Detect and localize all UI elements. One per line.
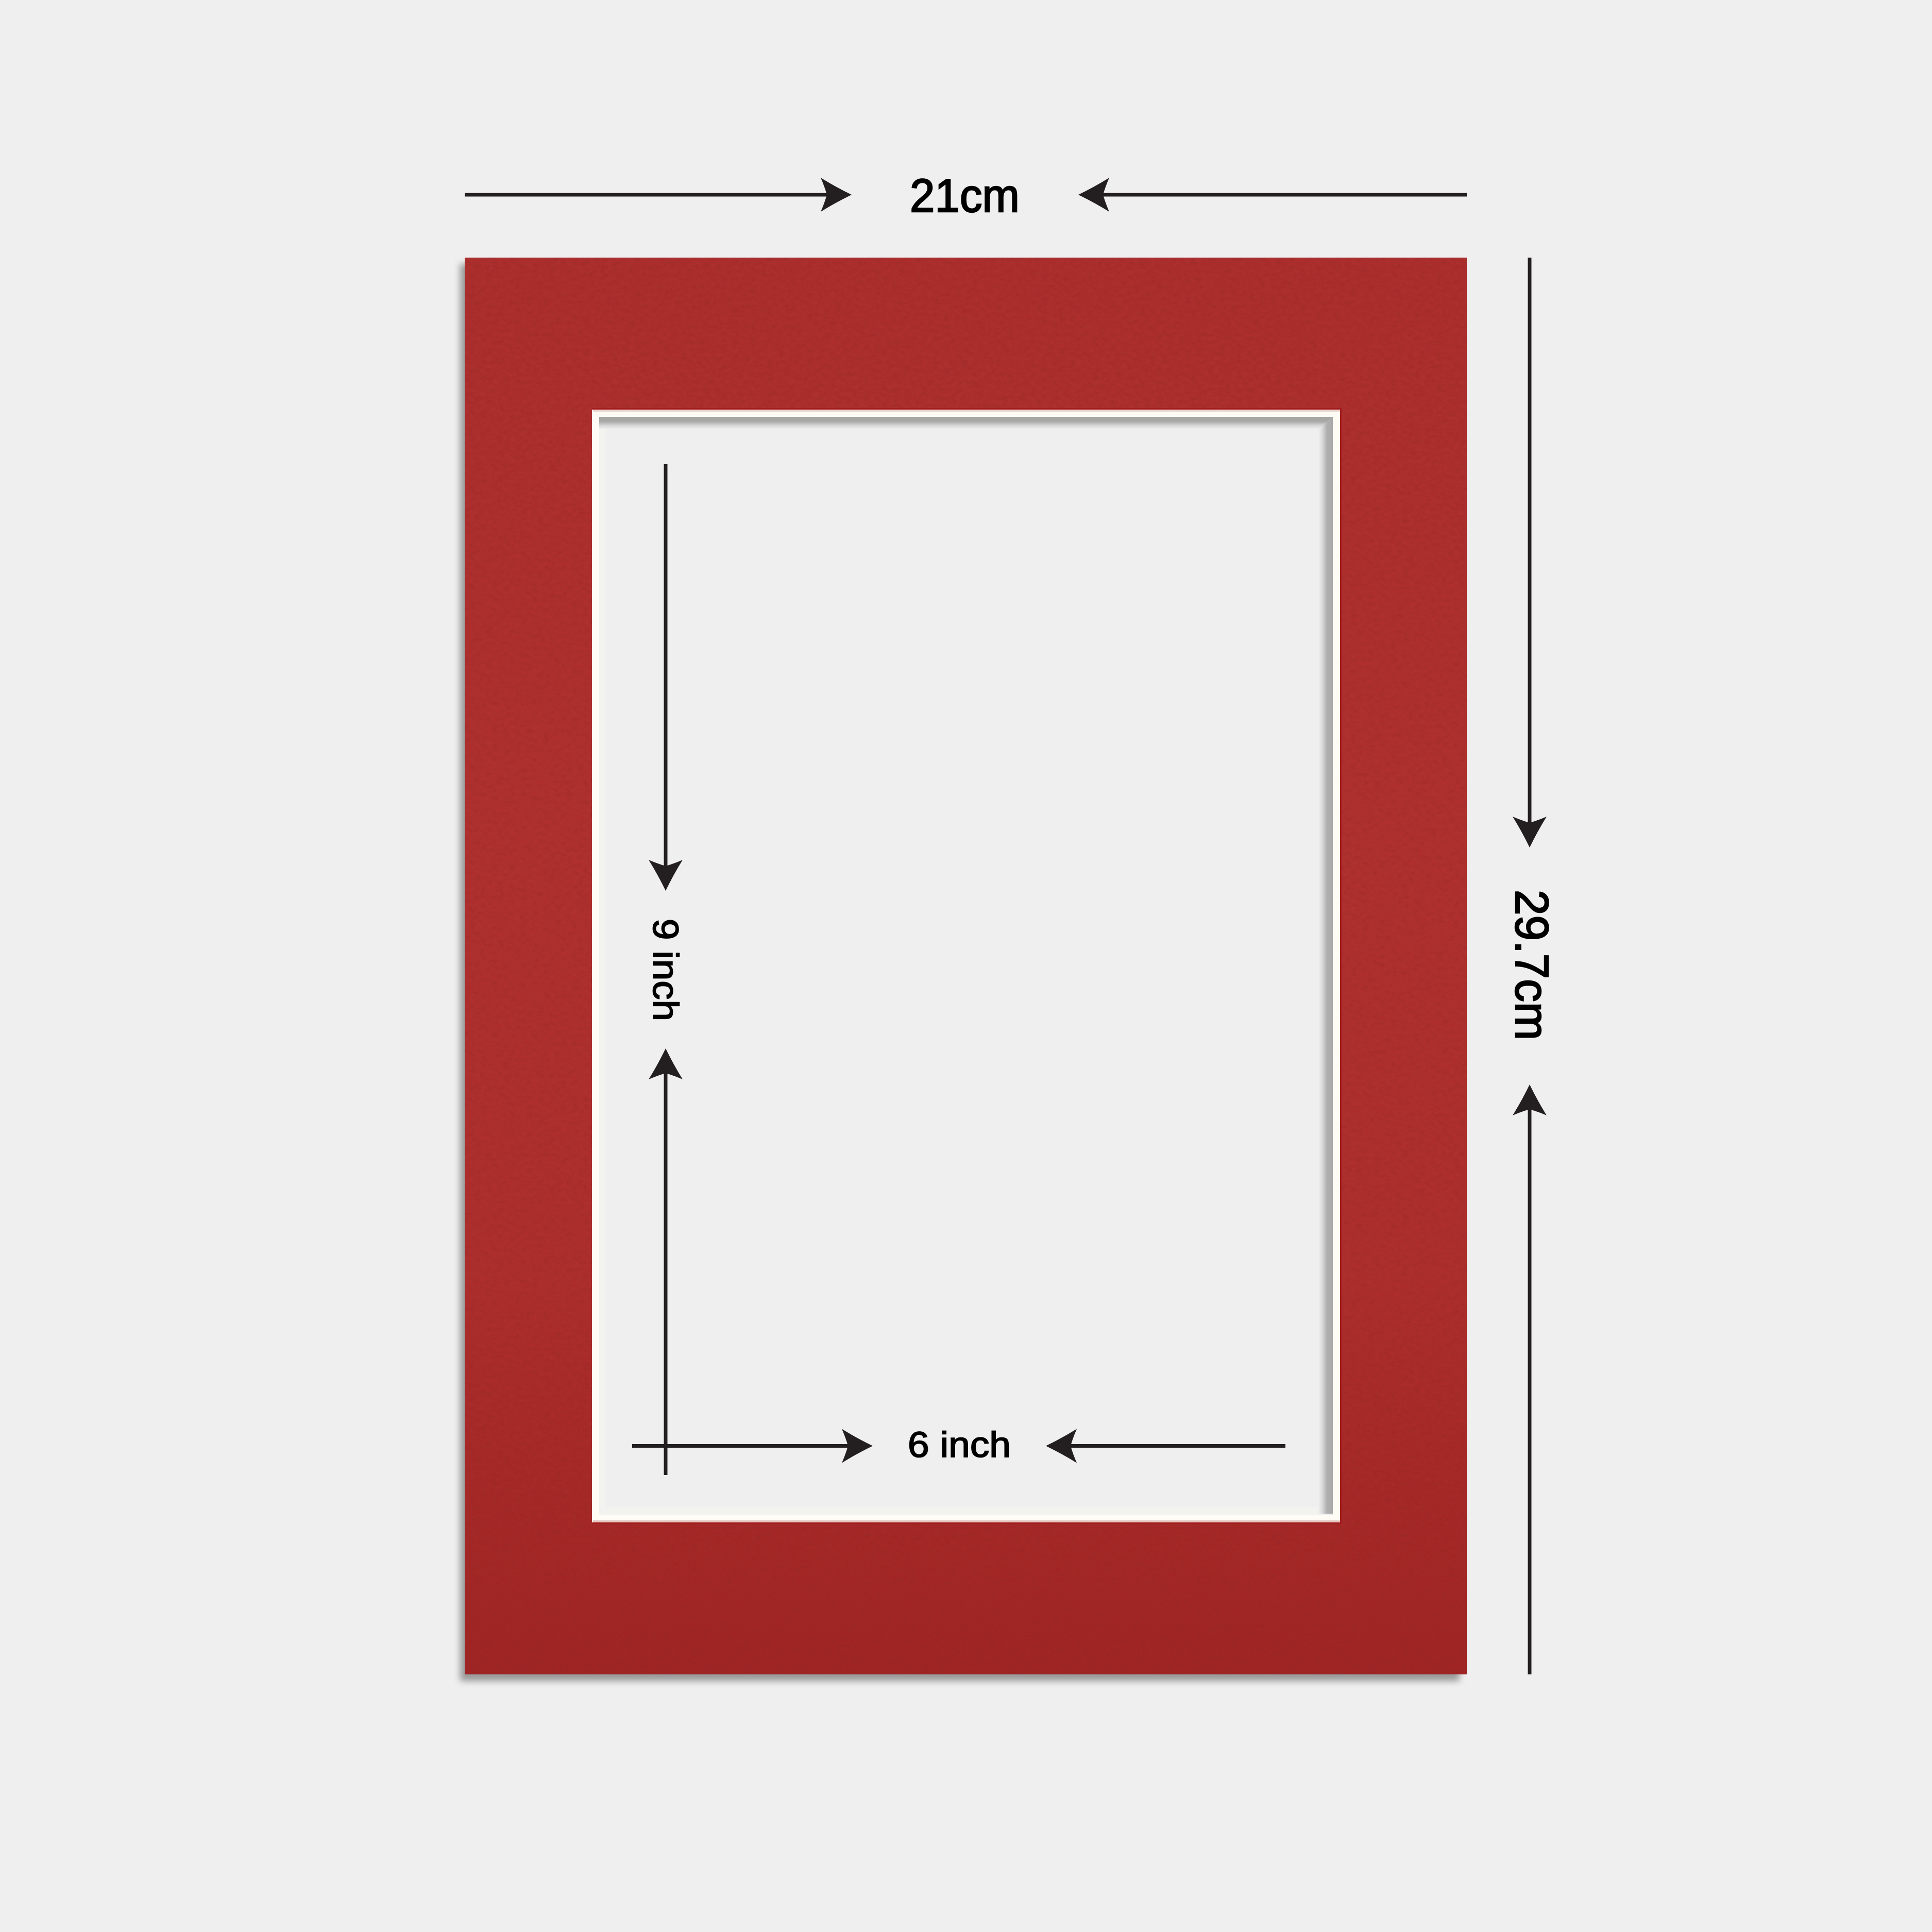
down arrow: [649, 464, 683, 891]
label 9 inch: 9 inch: [646, 919, 686, 1021]
dimension: 9 inch height: [646, 464, 686, 1475]
up arrow: [1513, 1084, 1547, 1674]
aperture opening: [599, 417, 1333, 1515]
label 29.7cm: 29.7cm: [1505, 890, 1557, 1040]
left arrow: [632, 1429, 873, 1463]
down arrow: [1513, 258, 1547, 848]
aperture cream bevel: [592, 410, 1340, 1522]
up arrow: [649, 1048, 683, 1475]
right arrow: [1046, 1429, 1285, 1463]
red mount board with window: [465, 258, 1467, 1674]
label 6 inch: 6 inch: [908, 1425, 1011, 1465]
aperture dark rim: [592, 409, 1341, 1523]
dimension: 21cm width: [465, 170, 1467, 222]
label 21cm: 21cm: [910, 170, 1020, 222]
dimension: 29.7cm height: [1505, 258, 1557, 1674]
left arrow: [465, 178, 852, 212]
dimension: 6 inch width: [632, 1425, 1285, 1465]
right arrow: [1078, 178, 1467, 212]
mount drop shadow: [460, 264, 1460, 1681]
paper grain texture: [465, 258, 1467, 1674]
panel: red photo mount: [460, 258, 1467, 1681]
